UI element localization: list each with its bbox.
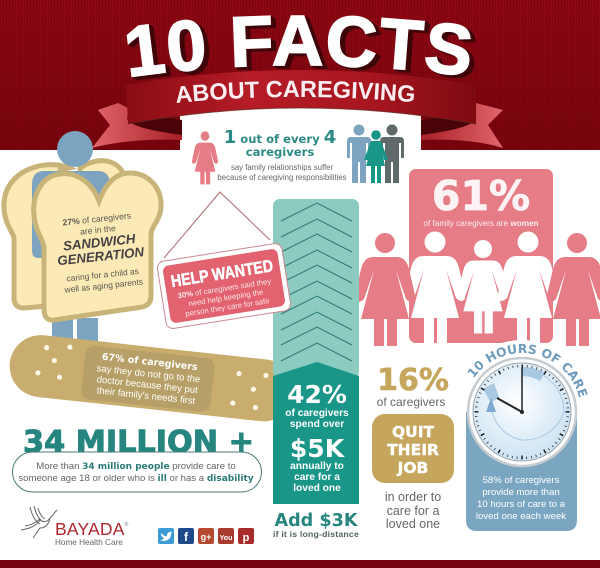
white backdrop for clock [450, 340, 594, 484]
34 million pill: someone age 18 or older who is ill or has a disability [18, 473, 254, 484]
panel: 10 hours of care [466, 412, 577, 531]
fact: 16 percent quit job: JOB [397, 459, 428, 477]
panel: women 61 percent [409, 169, 553, 343]
panel: sandwich generation bread: are in the [80, 223, 116, 237]
social media icons: You [220, 535, 232, 542]
fact: 1 out of every 4 [217, 127, 347, 182]
add 3K callout: if it is long-distance [273, 529, 359, 539]
panel: 10 hours of care: 10 hours of care to a [477, 499, 566, 510]
panel: 10 hours of care: 58% of caregivers [483, 475, 560, 486]
fact: 16 percent quit job: of caregivers [377, 395, 445, 409]
bandage panel [6, 332, 297, 424]
logo: Bayada: ® [125, 521, 129, 528]
panel: sandwich generation bread: SANDWICH [62, 231, 137, 254]
fact: 16 percent quit job: 16% [377, 363, 449, 398]
social media icons: g+ [201, 532, 211, 542]
bandage panel: doctor because they put [96, 374, 199, 396]
hanging help wanted sign: person they care for safe [185, 296, 270, 318]
social media icons: f [184, 530, 189, 544]
panel: spending chevrons: of caregivers [285, 408, 349, 419]
34 million pill: More than 34 million people provide care to [36, 461, 236, 472]
fact: 1 out of every 4: caregivers [246, 145, 314, 159]
fact: 16 percent quit job: QUIT [392, 423, 434, 441]
add 3K callout: Add $3K [274, 511, 359, 531]
fact: 1 out of every 4: say family relationships suffer [231, 163, 333, 172]
fact: 16 percent quit job: care for a [387, 504, 439, 518]
panel: sandwich generation bread: GENERATION [57, 244, 145, 268]
pink women figures [355, 233, 600, 346]
panel: 10 hours of care: provide more than [482, 487, 560, 498]
panel: spending chevrons: loved one [293, 483, 341, 494]
panel: sandwich generation bread: caring for a child as [66, 266, 139, 283]
panel: sandwich generation bread: well as aging parents [63, 277, 143, 295]
logo: Bayada: Home Health Care [55, 538, 123, 547]
icon: dove [21, 506, 57, 538]
banner ribbon [92, 70, 503, 150]
panel: sandwich generation bread [4, 131, 161, 344]
34 million pill [12, 452, 262, 492]
hanging help wanted sign: 30% of caregivers said they [177, 277, 272, 300]
fact: 16 percent quit job [372, 363, 454, 531]
curved heading: 10 hours of care: 10 HOURS OF CARE [468, 344, 588, 398]
panel: spending chevrons: annually to [290, 461, 344, 472]
panel: women 61 percent: of family caregivers are women [423, 219, 539, 228]
white women figures [405, 232, 558, 345]
hanging help wanted sign: need help keeping the [188, 287, 264, 308]
panel: spending chevrons [273, 199, 359, 504]
panel: 10 hours of care: loved one each week [476, 511, 566, 522]
subtitle: ABOUT CAREGIVING [176, 80, 414, 103]
panel: sandwich generation bread: 27% of caregivers [62, 210, 131, 228]
hanging help wanted sign: HELP WANTED [170, 256, 274, 291]
icon: family group [347, 124, 404, 183]
fact: 16 percent quit job: in order to [385, 490, 441, 504]
34 million heading: 34 MILLION + [23, 425, 254, 460]
icon: clock [468, 358, 576, 466]
panel: spending chevrons: spend over [290, 419, 344, 430]
panel: spending chevrons: $5K [290, 434, 346, 463]
social media icons [158, 528, 254, 544]
person behind bread [32, 131, 110, 344]
bandage panel: say they do not go to the [96, 363, 201, 385]
panel: spending chevrons: 42% [287, 380, 347, 409]
logo: Bayada: BAYADA [55, 519, 125, 539]
add 3K callout [273, 511, 359, 539]
panel: spending chevrons: care for a [294, 472, 340, 483]
hanging help wanted sign [156, 192, 292, 329]
fact: 16 percent quit job: loved one [386, 517, 440, 531]
footer band [0, 560, 600, 568]
fact: 1 out of 4 woman icon [192, 131, 218, 184]
social media icons: p [243, 532, 250, 544]
panel: women 61 percent: 61% [432, 172, 530, 220]
fact: 16 percent quit job: THEIR [387, 441, 439, 459]
header background [0, 0, 600, 150]
bandage panel: their family's needs first [96, 385, 196, 407]
fact: 1 out of every 4: because of caregiving responsibilities [217, 173, 347, 182]
fact: 1 out of every 4: 1 out of every 4 [224, 127, 336, 148]
title: 10 FACTS [126, 15, 476, 80]
bandage panel: 67% of caregivers [101, 352, 198, 373]
logo: Bayada [21, 506, 129, 547]
